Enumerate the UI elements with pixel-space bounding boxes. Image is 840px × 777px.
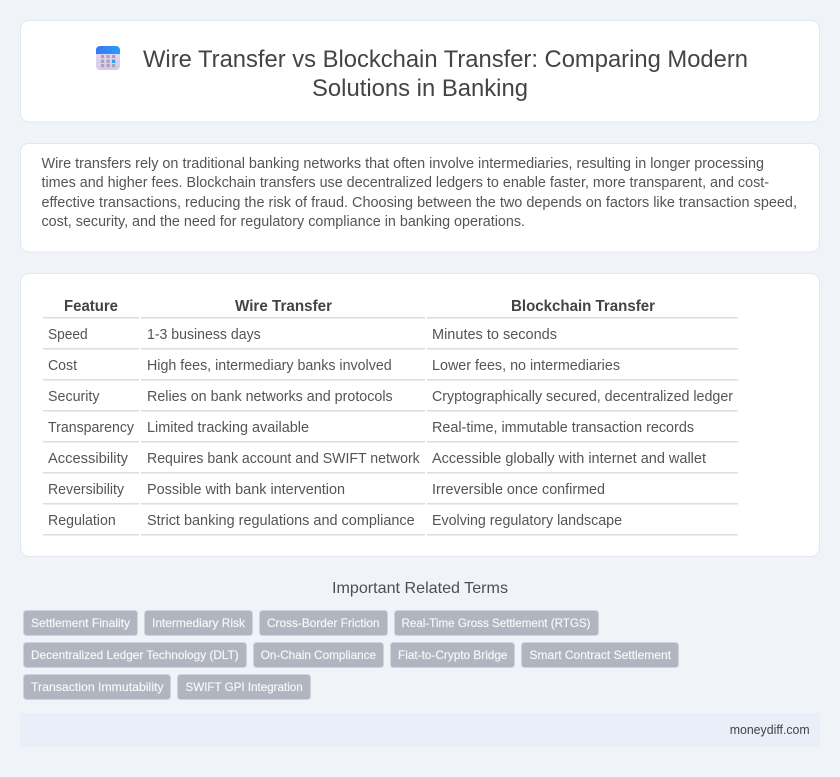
footer	[20, 713, 820, 747]
tag: Cross-Border Friction: Cross-Border Friction	[267, 616, 380, 630]
tag: On-Chain Compliance: On-Chain Compliance	[261, 648, 376, 662]
heading: related terms: Important Related Terms	[332, 580, 508, 597]
table row: security: Relies on bank networks and protocols	[147, 389, 393, 405]
table row: accessibility: Accessible globally with internet and wallet	[432, 451, 706, 467]
table row: speed	[43, 327, 738, 350]
table row: speed: Minutes to seconds	[432, 327, 557, 343]
panel: comparison table	[20, 274, 820, 556]
table row: reversibility: Possible with bank intervention	[147, 482, 345, 498]
table row: security: Security	[48, 389, 100, 405]
table row: security: Cryptographically secured, decentralized ledger	[432, 389, 733, 405]
table row: cost	[43, 358, 738, 380]
footer: moneydiff.com	[730, 722, 810, 737]
table header row: Feature	[64, 298, 118, 315]
table row: cost: Lower fees, no intermediaries	[432, 358, 620, 374]
panel: related term tags	[24, 610, 678, 700]
tag: Smart Contract Settlement: Smart Contract Settlement	[530, 648, 672, 662]
text block: summary paragraph: Wire transfers rely on traditional banking networks that often involve intermediaries, resulting in longer processing	[42, 156, 764, 172]
tag: Fiat-to-Crypto Bridge	[390, 642, 514, 668]
title: Wire Transfer vs Blockchain Transfer: Comparing Modern	[143, 46, 748, 73]
table row: cost: High fees, intermediary banks involved	[147, 358, 392, 374]
table header row: Blockchain Transfer	[511, 298, 655, 315]
tag: Smart Contract Settlement	[522, 642, 678, 668]
table row: transparency: Limited tracking available	[147, 420, 309, 436]
text block: summary paragraph	[42, 156, 797, 230]
table row: accessibility: Accessibility	[48, 451, 129, 467]
table row: reversibility: Irreversible once confirmed	[432, 482, 605, 498]
tag: SWIFT GPI Integration: SWIFT GPI Integration	[186, 680, 303, 694]
table row: transparency: Transparency	[48, 420, 135, 436]
tag: Decentralized Ledger Technology (DLT)	[24, 642, 246, 668]
table row: transparency: Real-time, immutable transaction records	[432, 420, 694, 436]
table row: regulation: Strict banking regulations and compliance	[147, 513, 415, 529]
table row: regulation: Regulation	[48, 513, 116, 529]
table row: accessibility	[43, 451, 738, 474]
table row: cost: Cost	[48, 358, 77, 374]
tag: Intermediary Risk	[144, 610, 252, 636]
table row: speed: 1-3 business days	[147, 327, 261, 343]
table row: reversibility	[43, 482, 738, 504]
panel: introduction	[20, 144, 820, 252]
table row: transparency	[43, 420, 738, 442]
title: Solutions in Banking	[312, 75, 528, 102]
tag: Cross-Border Friction	[260, 610, 388, 636]
tag: On-Chain Compliance	[254, 642, 384, 668]
tag: Fiat-to-Crypto Bridge: Fiat-to-Crypto Bridge	[398, 648, 508, 662]
table row: speed: Speed	[48, 327, 88, 343]
text block: summary paragraph: cost, security, and the need for regulatory compliance in banking operations.	[42, 214, 525, 230]
tag: SWIFT GPI Integration	[178, 674, 310, 700]
tag: Real-Time Gross Settlement (RTGS)	[394, 610, 598, 636]
table header row	[43, 298, 738, 318]
table row: regulation	[43, 513, 738, 536]
table row: reversibility: Reversibility	[48, 482, 125, 498]
table row: security	[43, 389, 738, 412]
icon: calendar	[96, 46, 120, 70]
tag: Decentralized Ledger Technology (DLT): Decentralized Ledger Technology (DLT)	[31, 648, 239, 662]
text block: summary paragraph: times and higher fees. Blockchain transfers use decentralized ledgers to enable faster, more transparent, and cost-	[42, 175, 769, 191]
tag: Transaction Immutability: Transaction Immutability	[31, 680, 164, 694]
tag: Real-Time Gross Settlement (RTGS): Real-Time Gross Settlement (RTGS)	[402, 616, 591, 630]
panel: header	[20, 20, 820, 122]
tag: Intermediary Risk: Intermediary Risk	[152, 616, 246, 630]
table row: accessibility: Requires bank account and SWIFT network	[147, 451, 420, 467]
tag: Settlement Finality: Settlement Finality	[31, 616, 130, 630]
text block: summary paragraph: effective transactions, reducing the risk of fraud. Choosing between the two depends on factors like transaction speed,	[42, 195, 797, 211]
table row: regulation: Evolving regulatory landscape	[432, 513, 622, 529]
tag: Settlement Finality	[24, 610, 138, 636]
title	[143, 46, 748, 102]
tag: Transaction Immutability	[24, 674, 170, 700]
table header row: Wire Transfer	[235, 298, 332, 315]
